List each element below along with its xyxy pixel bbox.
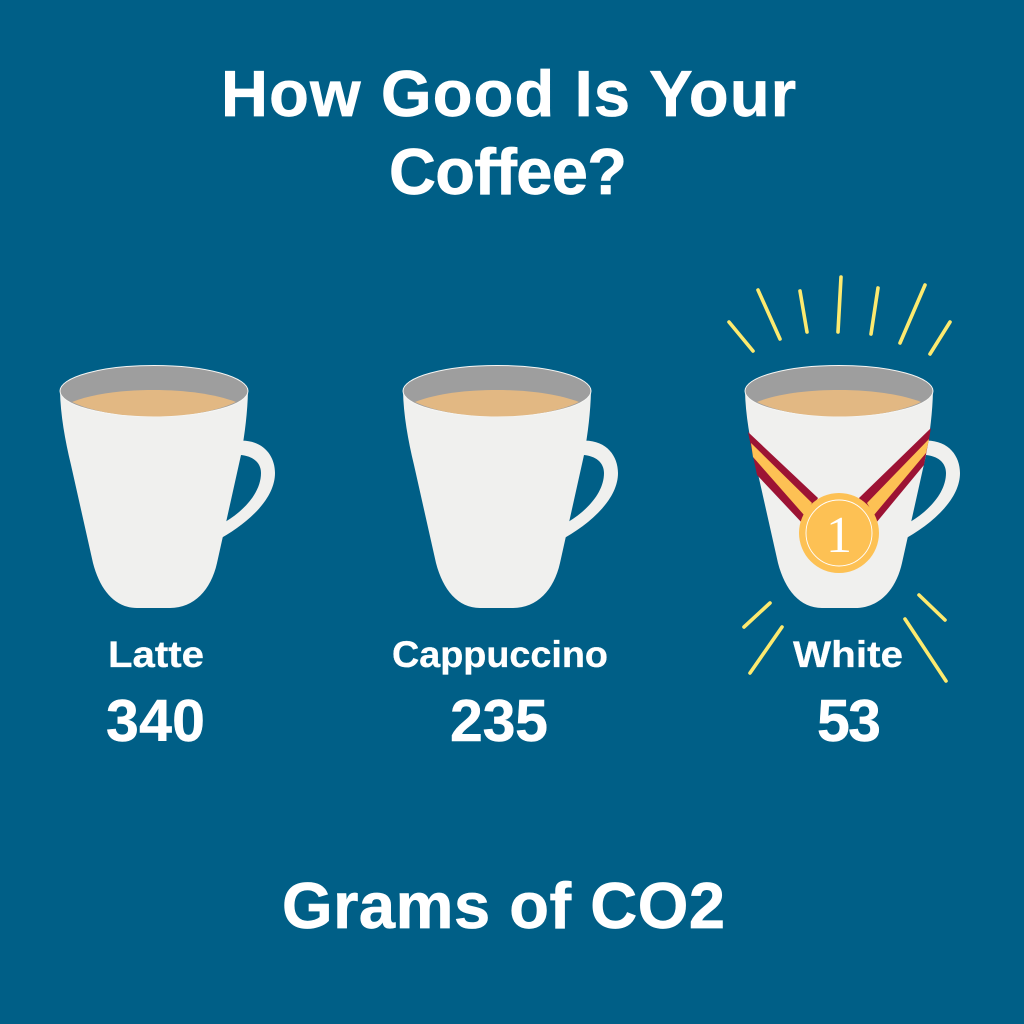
mug: latte bbox=[60, 366, 275, 608]
mug: white bbox=[745, 366, 960, 608]
celebration rays: top bbox=[729, 277, 950, 354]
medal number: 1 bbox=[826, 507, 852, 564]
footer caption: Grams of CO2 bbox=[282, 869, 725, 942]
medal bbox=[748, 428, 931, 573]
coffee surface bbox=[415, 390, 579, 416]
value: latte: 340 bbox=[106, 688, 205, 754]
mug body bbox=[745, 391, 933, 608]
title: How Good Is Your bbox=[221, 57, 796, 130]
title bbox=[221, 57, 796, 208]
value: cappuccino: 235 bbox=[450, 688, 548, 754]
mug handle bbox=[216, 441, 275, 541]
mug handle bbox=[559, 441, 618, 541]
mug body bbox=[60, 391, 248, 608]
label: latte: Latte bbox=[108, 634, 204, 675]
celebration rays: bottom bbox=[744, 595, 946, 681]
mug interior bbox=[745, 366, 933, 416]
medal disc bbox=[799, 493, 879, 573]
label: cappuccino: Cappuccino bbox=[392, 634, 608, 675]
mug interior bbox=[60, 366, 248, 416]
right ribbon stripe bbox=[867, 439, 929, 515]
medal ring bbox=[806, 500, 872, 566]
coffee surface bbox=[757, 390, 921, 416]
mug: cappuccino bbox=[403, 366, 618, 608]
mug body bbox=[403, 391, 591, 608]
mug handle bbox=[901, 441, 960, 541]
coffee surface bbox=[72, 390, 236, 416]
title: Coffee? bbox=[389, 135, 627, 208]
label: white: White bbox=[793, 634, 903, 675]
left ribbon stripe bbox=[751, 443, 812, 515]
right ribbon bbox=[859, 428, 931, 523]
left ribbon bbox=[748, 432, 818, 524]
mug interior bbox=[403, 366, 591, 416]
value: white: 53 bbox=[817, 688, 881, 754]
